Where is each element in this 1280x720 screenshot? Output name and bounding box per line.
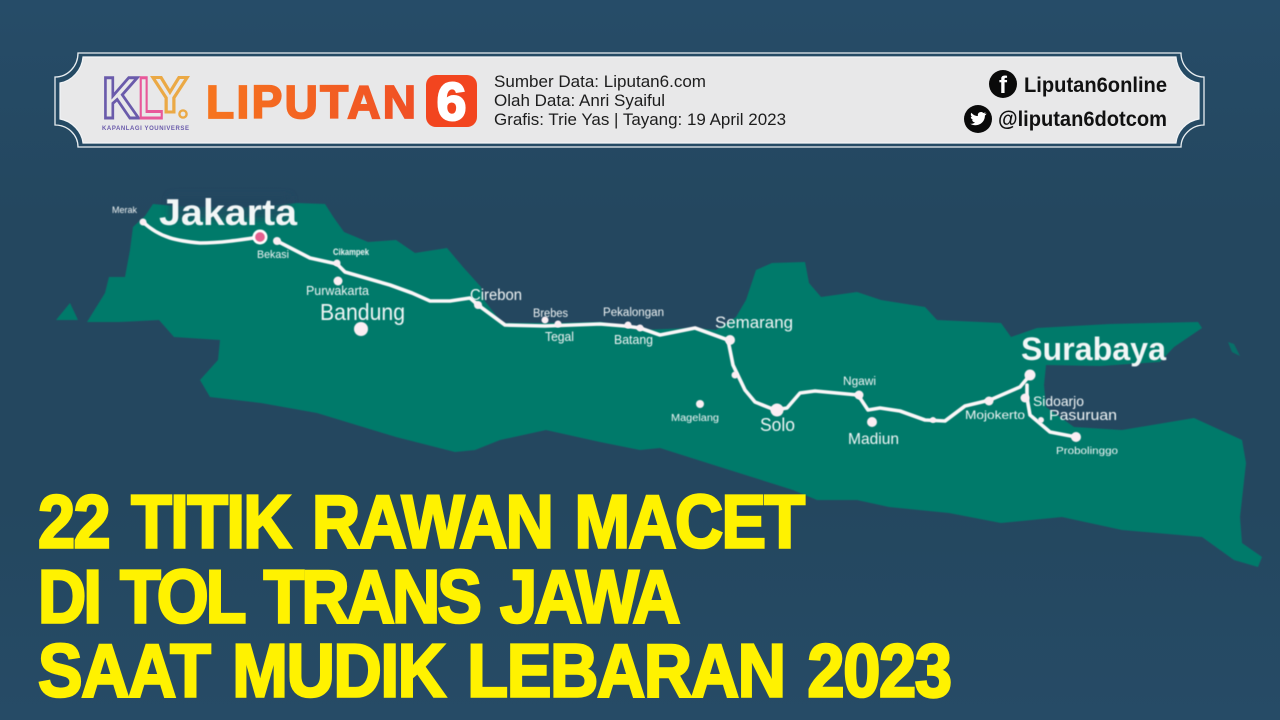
KLY logo: L bbox=[138, 66, 163, 131]
Liputan wordmark: LIPUTAN bbox=[206, 76, 416, 128]
city labels: Solo bbox=[760, 415, 795, 435]
icon: twitter bbox=[964, 105, 992, 133]
city labels: Bekasi bbox=[257, 249, 289, 261]
city labels: Surabaya bbox=[1021, 331, 1166, 367]
Java landmass bbox=[56, 203, 1262, 567]
banner frame bbox=[55, 53, 1204, 147]
title line 1: 22 TITIK RAWAN MACET bbox=[38, 481, 805, 564]
banner panel bbox=[60, 57, 1199, 143]
city labels: Cirebon bbox=[470, 287, 522, 304]
toll road route bbox=[143, 222, 1076, 437]
title bbox=[38, 481, 952, 713]
map of Java bbox=[56, 192, 1262, 567]
city labels: Pekalongan bbox=[603, 307, 664, 319]
city labels: Purwakarta bbox=[306, 284, 369, 298]
city labels: Merak bbox=[112, 205, 137, 216]
city labels bbox=[112, 192, 1166, 457]
KLY logo bbox=[102, 66, 189, 132]
source credits: Grafis: Trie Yas | Tayang: 19 April 2023 bbox=[494, 111, 786, 129]
city labels: Brebes bbox=[533, 308, 568, 320]
icon: facebook bbox=[989, 70, 1017, 99]
city labels: Ngawi bbox=[843, 376, 876, 388]
source credits: Sumber Data: Liputan6.com bbox=[494, 73, 706, 91]
Liputan 6 badge bbox=[426, 72, 477, 132]
KLY logo: Y bbox=[152, 67, 188, 123]
city labels: Semarang bbox=[715, 313, 793, 332]
title line 2: DI TOL TRANS JAWA bbox=[38, 556, 681, 639]
city labels: Pasuruan bbox=[1049, 408, 1117, 424]
source credits: Olah Data: Anri Syaiful bbox=[494, 92, 665, 110]
Liputan 6 badge: 6 bbox=[436, 72, 467, 132]
title line 3: SAAT MUDIK LEBARAN 2023 bbox=[38, 630, 952, 713]
KLY logo: K bbox=[102, 66, 139, 131]
city labels: Probolinggo bbox=[1056, 446, 1119, 457]
header banner bbox=[55, 53, 1204, 147]
KLY logo: KAPANLAGI YOUNIVERSE bbox=[102, 126, 189, 132]
city markers bbox=[140, 218, 1081, 442]
city labels: Madiun bbox=[848, 431, 899, 448]
city labels: Batang bbox=[614, 332, 653, 347]
city labels: Tegal bbox=[545, 329, 574, 344]
city labels: Bandung bbox=[320, 299, 405, 325]
city labels: Jakarta bbox=[159, 192, 297, 233]
facebook handle: Liputan6online bbox=[1024, 74, 1167, 97]
city labels: Sidoarjo bbox=[1033, 393, 1084, 409]
source credits bbox=[494, 73, 786, 129]
twitter handle: @liputan6dotcom bbox=[998, 108, 1167, 131]
dark haze behind Jakarta label bbox=[170, 196, 290, 220]
icon: facebook: f bbox=[999, 72, 1008, 99]
city labels: Magelang bbox=[671, 413, 719, 424]
city labels: Cikampek bbox=[333, 247, 370, 258]
city labels: Mojokerto bbox=[965, 408, 1025, 422]
